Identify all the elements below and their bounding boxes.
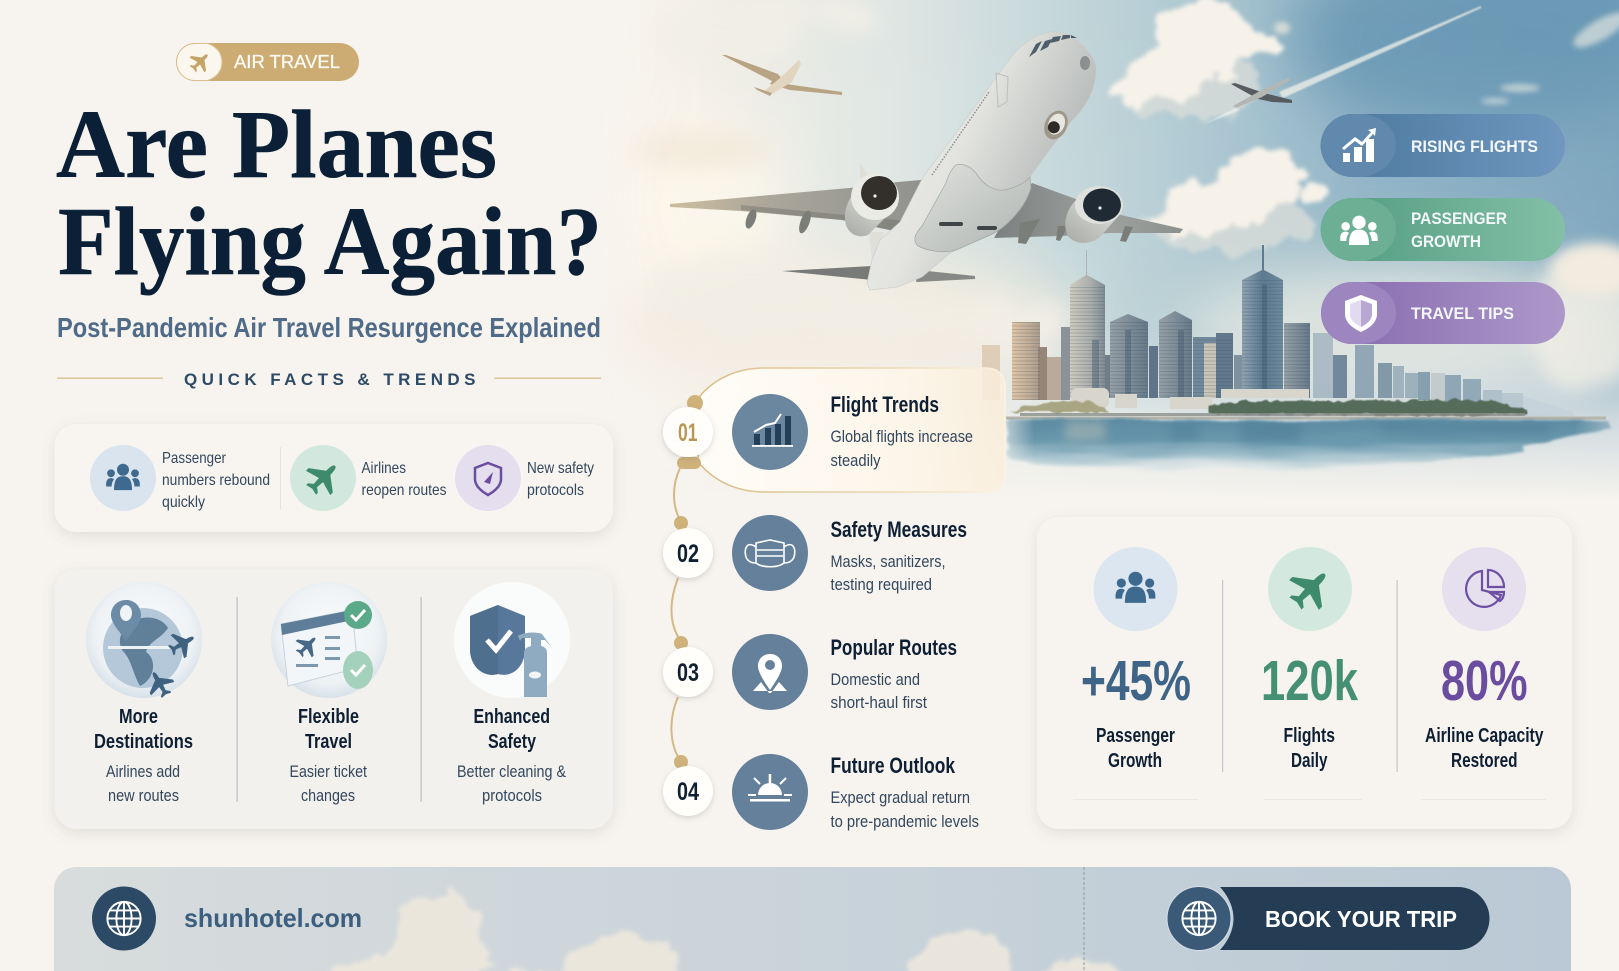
stat: flights daily: Flights — [1284, 725, 1335, 747]
text: future outlook: Expect gradual return — [830, 788, 970, 807]
button: book your trip — [1167, 886, 1490, 950]
right wing — [994, 183, 1183, 238]
text: safety measures: Safety Measures — [830, 517, 967, 542]
icon: location pin — [732, 634, 808, 710]
title: Flying Again? — [58, 188, 602, 295]
text: safety measures: Masks, sanitizers, — [830, 552, 946, 571]
wing-root fairing — [915, 164, 1031, 252]
icon: globe with planes — [103, 600, 200, 702]
subtitle: Post-Pandemic Air Travel Resurgence Explained — [57, 312, 601, 343]
stat: flights daily: 120k — [1261, 649, 1358, 713]
icon: sunrise — [732, 754, 808, 830]
small plane: top left — [722, 55, 842, 96]
small plane: top right — [1231, 78, 1292, 108]
stat: airline capacity: 80% — [1441, 649, 1528, 713]
benefit: enhanced safety: protocols — [482, 786, 542, 805]
stat: airline capacity — [1425, 547, 1544, 772]
benefit: flexible travel: Flexible — [298, 706, 359, 728]
timeline connector — [671, 468, 680, 760]
timeline item 03: 03 — [677, 659, 699, 687]
fact: passengers: quickly — [162, 494, 205, 511]
pill: passenger growth — [1321, 198, 1565, 261]
benefit: enhanced safety: Enhanced — [474, 706, 550, 728]
text: popular routes — [830, 635, 957, 712]
benefit: flexible travel: Travel — [305, 731, 352, 753]
text: popular routes: Domestic and — [830, 670, 920, 689]
icon: rising chart — [1342, 128, 1376, 162]
pill: rising flights: RISING FLIGHTS — [1411, 137, 1538, 156]
stat: passenger growth: Passenger — [1096, 725, 1175, 747]
stat: passenger growth — [1081, 547, 1191, 772]
fact: safety: New safety — [527, 460, 594, 477]
benefit: more destinations: Airlines add — [106, 762, 180, 781]
stat: airline capacity: Airline Capacity — [1425, 725, 1544, 747]
fact: passengers: numbers rebound — [162, 472, 270, 489]
text: flight trends: steadily — [830, 451, 881, 470]
fact: passengers: Passenger — [162, 450, 227, 467]
pill: rising flights — [1321, 114, 1565, 177]
footer band — [54, 867, 1571, 971]
benefit: more destinations: new routes — [108, 786, 179, 805]
icon: shield — [1345, 295, 1377, 332]
footer background with clouds — [54, 867, 1571, 971]
benefit: flexible travel: changes — [301, 786, 355, 805]
icon: ticket with checks — [281, 601, 373, 689]
section heading: quick facts: QUICK FACTS & TRENDS — [184, 370, 476, 389]
website: shunhotel.com — [184, 903, 362, 933]
title — [56, 91, 602, 295]
panel: benefits — [54, 569, 613, 829]
timeline item 01: highlighted card — [663, 368, 1005, 492]
tailplanes — [782, 266, 872, 280]
text: future outlook — [830, 753, 979, 831]
benefit: more destinations — [86, 582, 202, 805]
fact: airlines: Airlines — [362, 460, 406, 477]
sky gradient — [600, 0, 1619, 500]
pill: travel tips: TRAVEL TIPS — [1411, 304, 1514, 323]
cockpit windows — [1029, 35, 1077, 57]
title: Are Planes — [56, 91, 497, 198]
benefit: more destinations: More — [119, 706, 158, 728]
pill: passenger growth: PASSENGER — [1411, 209, 1507, 228]
cabin windows — [932, 92, 989, 175]
timeline item 04: 04 — [677, 778, 699, 806]
timeline item 02: 02 — [677, 540, 699, 568]
stat: passenger growth: +45% — [1081, 649, 1191, 713]
panel: quick facts — [54, 424, 613, 532]
number 01 — [663, 395, 713, 469]
text: future outlook: Future Outlook — [830, 753, 956, 778]
text: popular routes: Popular Routes — [830, 635, 957, 660]
contrail — [1204, 6, 1481, 124]
text: flight trends: Global flights increase — [830, 427, 973, 446]
fact: passengers — [90, 445, 270, 511]
icon: mask — [732, 515, 808, 591]
water — [1006, 420, 1612, 471]
stat: flights daily — [1261, 547, 1358, 772]
pill: passenger growth: GROWTH — [1411, 232, 1481, 251]
panel: key statistics — [1037, 517, 1572, 829]
badge: air travel — [176, 43, 359, 81]
pill: travel tips — [1321, 282, 1565, 344]
text: popular routes: short-haul first — [830, 693, 927, 712]
website — [92, 886, 362, 950]
gear door — [1040, 107, 1072, 143]
main airliner — [670, 32, 1183, 290]
radome mark — [1080, 56, 1090, 70]
skyline — [982, 245, 1606, 420]
stat: passenger growth: Growth — [1108, 750, 1162, 772]
text: future outlook: to pre-pandemic levels — [830, 812, 979, 831]
left engine — [845, 174, 899, 236]
clouds — [650, 0, 1619, 390]
benefit: flexible travel — [271, 582, 387, 805]
benefit: flexible travel: Easier ticket — [290, 762, 367, 781]
stat: flights daily: Daily — [1291, 750, 1328, 772]
number 01: 01 — [678, 419, 698, 447]
icon: plane — [185, 47, 215, 77]
benefit: enhanced safety — [454, 582, 570, 805]
badge: air travel: AIR TRAVEL — [234, 52, 340, 72]
button: book your trip: BOOK YOUR TRIP — [1265, 906, 1457, 932]
text: safety measures — [830, 517, 967, 594]
benefit: more destinations: Destinations — [94, 731, 193, 753]
timeline item 03 — [663, 634, 957, 712]
flap fairings — [743, 208, 1133, 244]
fin — [860, 163, 884, 262]
benefit: enhanced safety: Safety — [488, 731, 537, 753]
timeline item 04 — [663, 753, 979, 831]
icon: shield and spray — [470, 605, 552, 697]
fact: safety — [455, 445, 594, 511]
stat: airline capacity: Restored — [1451, 750, 1518, 772]
fact: airlines: reopen routes — [362, 482, 446, 499]
belly slots — [939, 222, 997, 230]
timeline item 02 — [663, 515, 967, 594]
icon: people — [1340, 216, 1378, 245]
hero illustration: sky, planes and skyline — [600, 0, 1619, 500]
right engine — [1065, 186, 1123, 243]
left wing — [670, 177, 954, 236]
fact: safety: protocols — [527, 482, 584, 499]
fact: airlines — [290, 445, 446, 511]
icon: bar chart — [732, 394, 808, 470]
text: flight trends: Flight Trends — [830, 392, 939, 417]
text: safety measures: testing required — [830, 575, 932, 594]
category pills — [1321, 114, 1565, 344]
door — [996, 73, 1008, 107]
fuselage — [867, 32, 1096, 290]
benefit: enhanced safety: Better cleaning & — [457, 762, 567, 781]
text: flight trends — [830, 392, 973, 470]
